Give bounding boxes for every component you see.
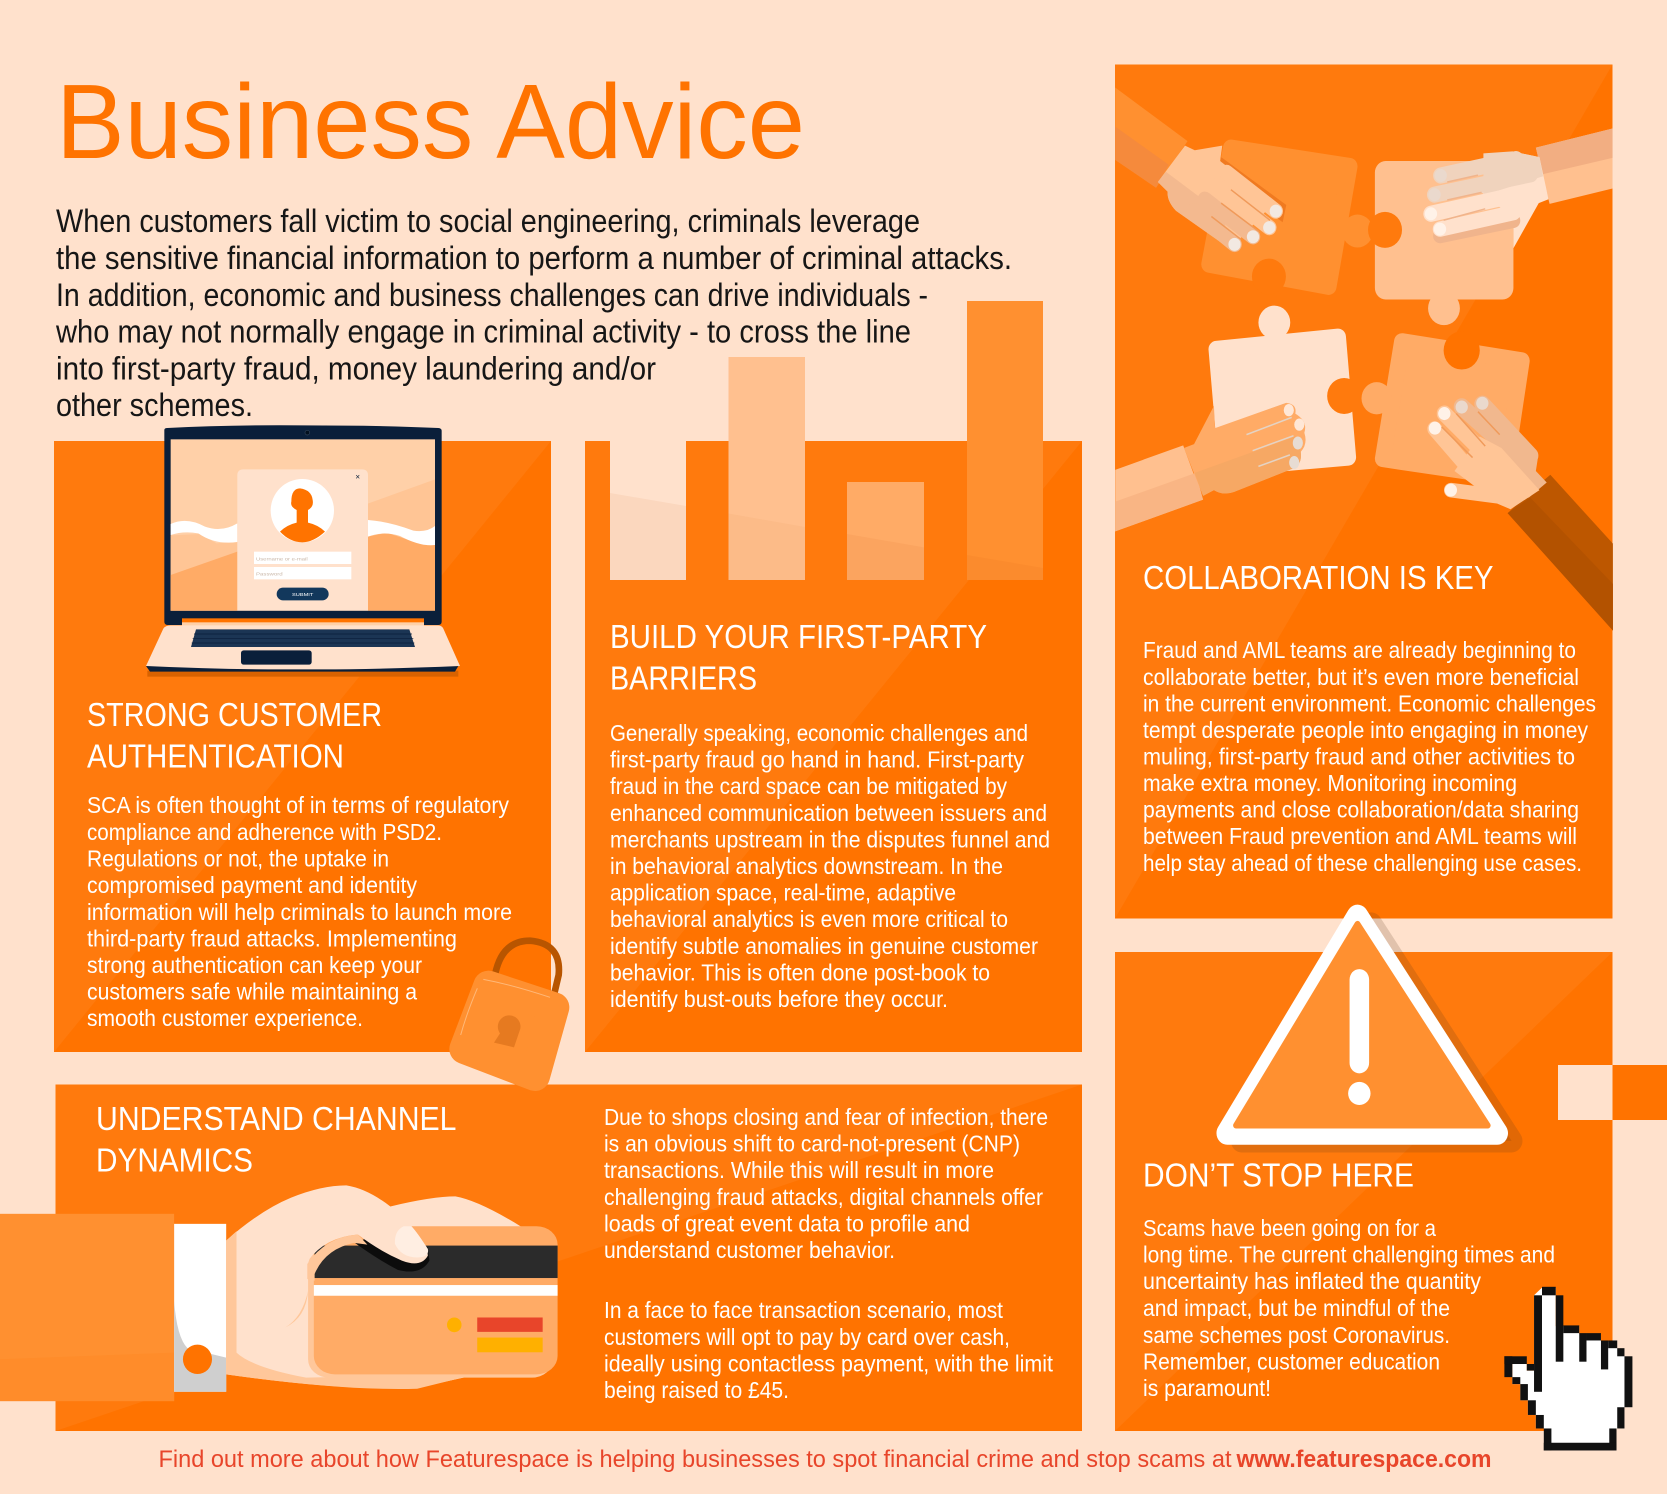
icon: laptop login: × xyxy=(355,473,360,482)
intro text block xyxy=(55,203,1012,423)
body text: challenging fraud attacks, digital channels offer xyxy=(604,1184,1043,1210)
body text: identify subtle anomalies in genuine customer xyxy=(610,933,1038,959)
intro text block: other schemes. xyxy=(56,387,253,423)
hand bottom-right xyxy=(1429,397,1613,631)
body text: Regulations or not, the uptake in xyxy=(87,846,389,872)
intro text block: When customers fall victim to social engineering, criminals leverage xyxy=(56,203,920,239)
footer call to action: www.featurespace.com xyxy=(1236,1446,1492,1473)
body text: first-party fraud go hand in hand. First-party xyxy=(610,746,1024,772)
body text: compromised payment and identity xyxy=(87,872,417,898)
heading: DON’T STOP HERE xyxy=(1143,1158,1414,1194)
heading xyxy=(87,697,382,776)
heading: COLLABORATION IS KEY xyxy=(1143,560,1494,597)
footer call to action: Find out more about how Featurespace is helping businesses to spot financial crime and stop scams at xyxy=(158,1446,1232,1473)
puzzle piece bottom-right xyxy=(1362,331,1522,477)
body text: Due to shops closing and fear of infection, there xyxy=(604,1104,1048,1130)
heading: STRONG CUSTOMER xyxy=(87,697,382,734)
hand bottom-left xyxy=(1115,403,1306,531)
icon: laptop login: Password xyxy=(256,571,283,577)
body text: payments and close collaboration/data sharing xyxy=(1143,796,1579,822)
body text: fraud in the card space can be mitigated by xyxy=(610,773,1007,799)
heading: DYNAMICS xyxy=(96,1142,253,1180)
body text: identify bust-outs before they occur. xyxy=(610,986,948,1012)
intro text block: the sensitive financial information to perform a number of criminal attacks. xyxy=(56,240,1012,276)
body text: uncertainty has inflated the quantity xyxy=(1143,1268,1481,1294)
body text: merchants upstream in the disputes funnel and xyxy=(610,826,1050,852)
body text: behavioral analytics is even more critical to xyxy=(610,906,1008,932)
body text: being raised to £45. xyxy=(604,1377,789,1403)
icon: pixel hand cursor xyxy=(1504,1287,1632,1450)
intro text block: into first-party fraud, money laundering and/or xyxy=(56,350,656,386)
heading xyxy=(96,1101,456,1180)
sleeve xyxy=(0,1214,174,1401)
illustration: hands holding puzzle pieces xyxy=(1115,88,1613,631)
intro text block: In addition, economic and business challenges can drive individuals - xyxy=(56,277,928,313)
body text: muling, first-party fraud and other activities to xyxy=(1143,744,1575,770)
hand top-right xyxy=(1425,128,1613,248)
icon: padlock xyxy=(461,941,559,1076)
body text: is an obvious shift to card-not-present (CNP) xyxy=(604,1130,1020,1156)
thumb xyxy=(285,1204,429,1328)
heading: UNDERSTAND CHANNEL xyxy=(96,1101,456,1138)
body text xyxy=(87,792,512,1031)
body text: in behavioral analytics downstream. In the xyxy=(610,853,1003,879)
panel: collaboration is key xyxy=(1115,64,1613,918)
body text: Remember, customer education xyxy=(1143,1348,1440,1374)
puzzle piece top-right xyxy=(1368,161,1513,325)
body text: behavior. This is often done post-book to xyxy=(610,960,990,986)
body text: ideally using contactless payment, with the limit xyxy=(604,1350,1054,1376)
body text: transactions. While this will result in more xyxy=(604,1157,994,1183)
body text: customers safe while maintaining a xyxy=(87,978,417,1004)
body text: smooth customer experience. xyxy=(87,1005,363,1031)
body text: enhanced communication between issuers and xyxy=(610,800,1047,826)
body text: collaborate better, but it’s even more beneficial xyxy=(1143,664,1579,690)
illustration: hand holding card xyxy=(0,1185,558,1401)
icon: warning triangle xyxy=(1227,916,1512,1141)
hand xyxy=(226,1185,553,1389)
body text: application space, real-time, adaptive xyxy=(610,880,956,906)
body text: understand customer behavior. xyxy=(604,1237,895,1263)
body text xyxy=(604,1104,1054,1403)
body text: between Fraud prevention and AML teams will xyxy=(1143,823,1577,849)
puzzle piece top-left xyxy=(1209,148,1373,295)
body text: loads of great event data to profile and xyxy=(604,1210,970,1236)
cuff xyxy=(174,1224,226,1392)
heading xyxy=(610,619,987,698)
icon: checker squares xyxy=(1558,1065,1667,1120)
body text: strong authentication can keep your xyxy=(87,952,422,978)
title: Business Advice xyxy=(56,63,805,181)
body text: make extra money. Monitoring incoming xyxy=(1143,770,1517,796)
icon: laptop login: Username or e-mail xyxy=(256,556,308,562)
body text: help stay ahead of these challenging use cases. xyxy=(1143,850,1582,876)
panel: first-party barriers xyxy=(585,301,1082,1052)
icon: laptop login xyxy=(146,425,460,677)
heading: BARRIERS xyxy=(610,660,757,698)
body text: customers will opt to pay by card over cash, xyxy=(604,1324,1010,1350)
icon: laptop login: SUBMIT xyxy=(292,592,313,598)
body text: long time. The current challenging times and xyxy=(1143,1242,1555,1268)
body text: Fraud and AML teams are already beginning to xyxy=(1143,637,1576,663)
heading: BUILD YOUR FIRST-PARTY xyxy=(610,619,987,656)
body text: tempt desperate people into engaging in money xyxy=(1143,717,1588,743)
body text: third-party fraud attacks. Implementing xyxy=(87,926,457,952)
body text: in the current environment. Economic challenges xyxy=(1143,690,1596,716)
credit card xyxy=(314,1226,558,1374)
body text: information will help criminals to launch more xyxy=(87,899,512,925)
body text xyxy=(610,720,1050,1012)
body text: same schemes post Coronavirus. xyxy=(1143,1322,1450,1348)
body text: Generally speaking, economic challenges and xyxy=(610,720,1028,746)
intro text block: who may not normally engage in criminal activity - to cross the line xyxy=(55,314,911,350)
panel: don't stop here xyxy=(1115,916,1667,1431)
body text xyxy=(1143,637,1596,876)
body text: compliance and adherence with PSD2. xyxy=(87,819,442,845)
body text: SCA is often thought of in terms of regulatory xyxy=(87,792,509,818)
panel: understand channel dynamics xyxy=(0,1084,1082,1431)
body text xyxy=(1143,1215,1555,1401)
panel: strong customer authentication xyxy=(54,425,551,1052)
body text: and impact, but be mindful of the xyxy=(1143,1295,1450,1321)
body text: is paramount! xyxy=(1143,1375,1271,1401)
bar chart xyxy=(610,301,1043,580)
hand top-left xyxy=(1115,88,1286,251)
puzzle piece bottom-left xyxy=(1216,306,1361,468)
heading: AUTHENTICATION xyxy=(87,738,344,776)
body text: Scams have been going on for a xyxy=(1143,1215,1436,1241)
body text: In a face to face transaction scenario, most xyxy=(604,1297,1004,1323)
